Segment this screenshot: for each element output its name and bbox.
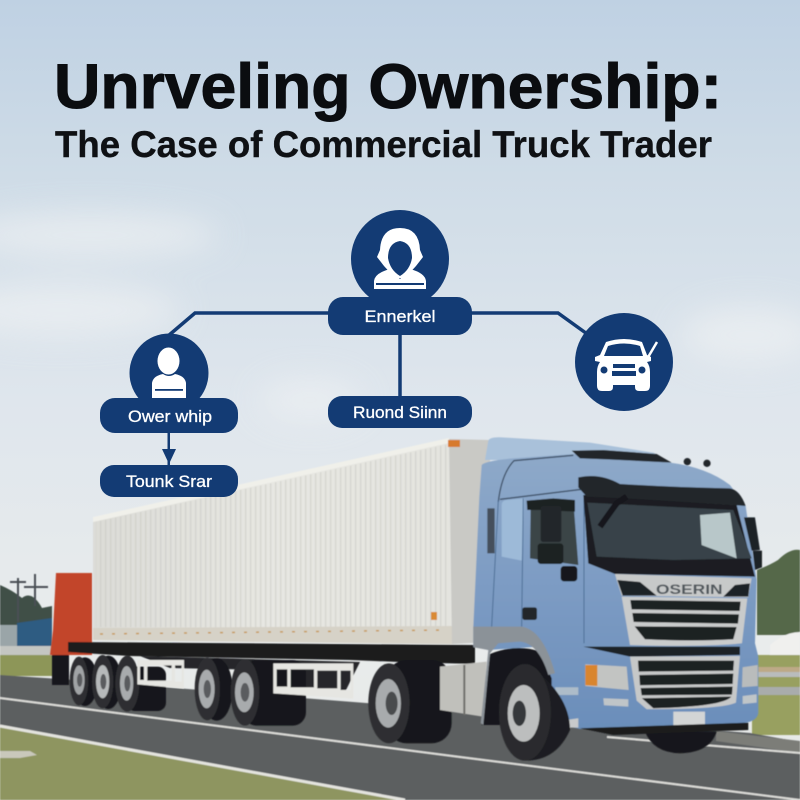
trailer side <box>93 441 452 644</box>
fender <box>473 627 555 725</box>
cab body <box>473 454 758 729</box>
sun visor <box>578 476 746 506</box>
pill: Ruond Siinn <box>328 396 472 428</box>
dark band under grille <box>583 647 740 657</box>
photo: background landscape <box>0 550 800 800</box>
fuel tank <box>440 662 487 717</box>
door handle <box>522 607 537 620</box>
node: vehicle <box>575 313 673 411</box>
pill: Ower whip: Ower whip <box>128 407 212 426</box>
windshield glass <box>587 503 752 560</box>
road edge line <box>0 726 405 800</box>
sleeper window <box>502 498 525 561</box>
blue building <box>17 618 52 647</box>
wiper arm <box>600 497 627 527</box>
left headlight <box>585 664 629 690</box>
side guard rack 2 <box>273 663 353 699</box>
front right tyre <box>645 732 717 753</box>
road centre line <box>0 698 800 800</box>
door window <box>530 501 578 565</box>
number plate <box>673 712 705 726</box>
trailer top rail <box>93 438 449 522</box>
road surface <box>0 675 800 800</box>
node: central owner <box>328 210 472 335</box>
pill: Ennerkel: Ennerkel <box>364 307 436 326</box>
trailer ribs <box>96 444 450 628</box>
pill: Ennerkel <box>328 297 472 335</box>
kerb <box>716 731 800 753</box>
roof deflector <box>485 437 672 463</box>
pill: Ruond Siinn: Ruond Siinn <box>353 403 447 422</box>
drain cover <box>0 751 37 758</box>
left tree line <box>0 585 52 650</box>
wheel 3 <box>115 656 166 712</box>
trailer front panel <box>449 439 490 644</box>
bumper shadow <box>580 723 748 735</box>
icon: left person <box>152 348 186 398</box>
far lane line <box>607 737 800 753</box>
subtitle: The Case of Commercial Truck Trader <box>55 124 712 165</box>
windshield surround <box>583 495 755 577</box>
right white car <box>770 632 800 655</box>
clouds <box>0 213 800 420</box>
red truck behind <box>50 573 92 685</box>
grab handle <box>487 508 495 553</box>
left background grass <box>0 655 60 676</box>
upper grille <box>622 597 747 646</box>
fog lights <box>603 694 757 707</box>
beacons <box>684 458 711 467</box>
right mirror <box>744 517 762 570</box>
side mirror <box>527 498 577 581</box>
wheel 5 <box>231 659 306 726</box>
right headlight <box>742 665 758 687</box>
front left wheel <box>499 664 570 761</box>
title: Unrveling Ownership: <box>54 52 722 122</box>
icon: central person <box>374 228 426 289</box>
roof line <box>498 455 582 502</box>
wheel arch <box>482 648 552 725</box>
lamp post <box>10 574 48 622</box>
right background ground <box>752 655 800 735</box>
rear wheels <box>70 655 452 743</box>
brand badge: OSERIN <box>656 581 723 597</box>
pill: Tounk Srar <box>100 465 238 497</box>
chassis shadow <box>140 656 360 692</box>
right circle <box>575 313 673 411</box>
photo: truck <box>50 437 762 761</box>
wheel 2 <box>92 655 122 709</box>
wheel 4 <box>195 658 233 721</box>
door seam <box>492 497 584 643</box>
right trees <box>757 550 800 635</box>
badge band <box>615 574 752 597</box>
wheel 6 <box>368 660 452 743</box>
roof vent <box>572 450 672 463</box>
wheel 1 <box>70 657 98 706</box>
windshield reflection <box>700 513 737 558</box>
connector: centre to left circle <box>168 313 330 336</box>
connector: centre to lower pill <box>398 333 402 398</box>
trailer <box>68 438 490 692</box>
chassis <box>68 642 475 664</box>
trailer bottom rail <box>93 626 452 644</box>
lower grille <box>630 656 740 709</box>
left circle <box>130 334 208 412</box>
connector: centre to right circle <box>470 313 590 336</box>
step <box>555 718 578 728</box>
icon: car <box>595 339 657 391</box>
node: left ownership <box>100 334 238 433</box>
pill: Tounk Srar: Tounk Srar <box>126 472 212 491</box>
arrow: ownership down to Tounk Srar <box>162 433 176 466</box>
tractor cab <box>440 437 762 761</box>
near-side grass <box>0 726 405 800</box>
central circle <box>351 210 449 308</box>
side guard rack 1 <box>137 660 184 689</box>
